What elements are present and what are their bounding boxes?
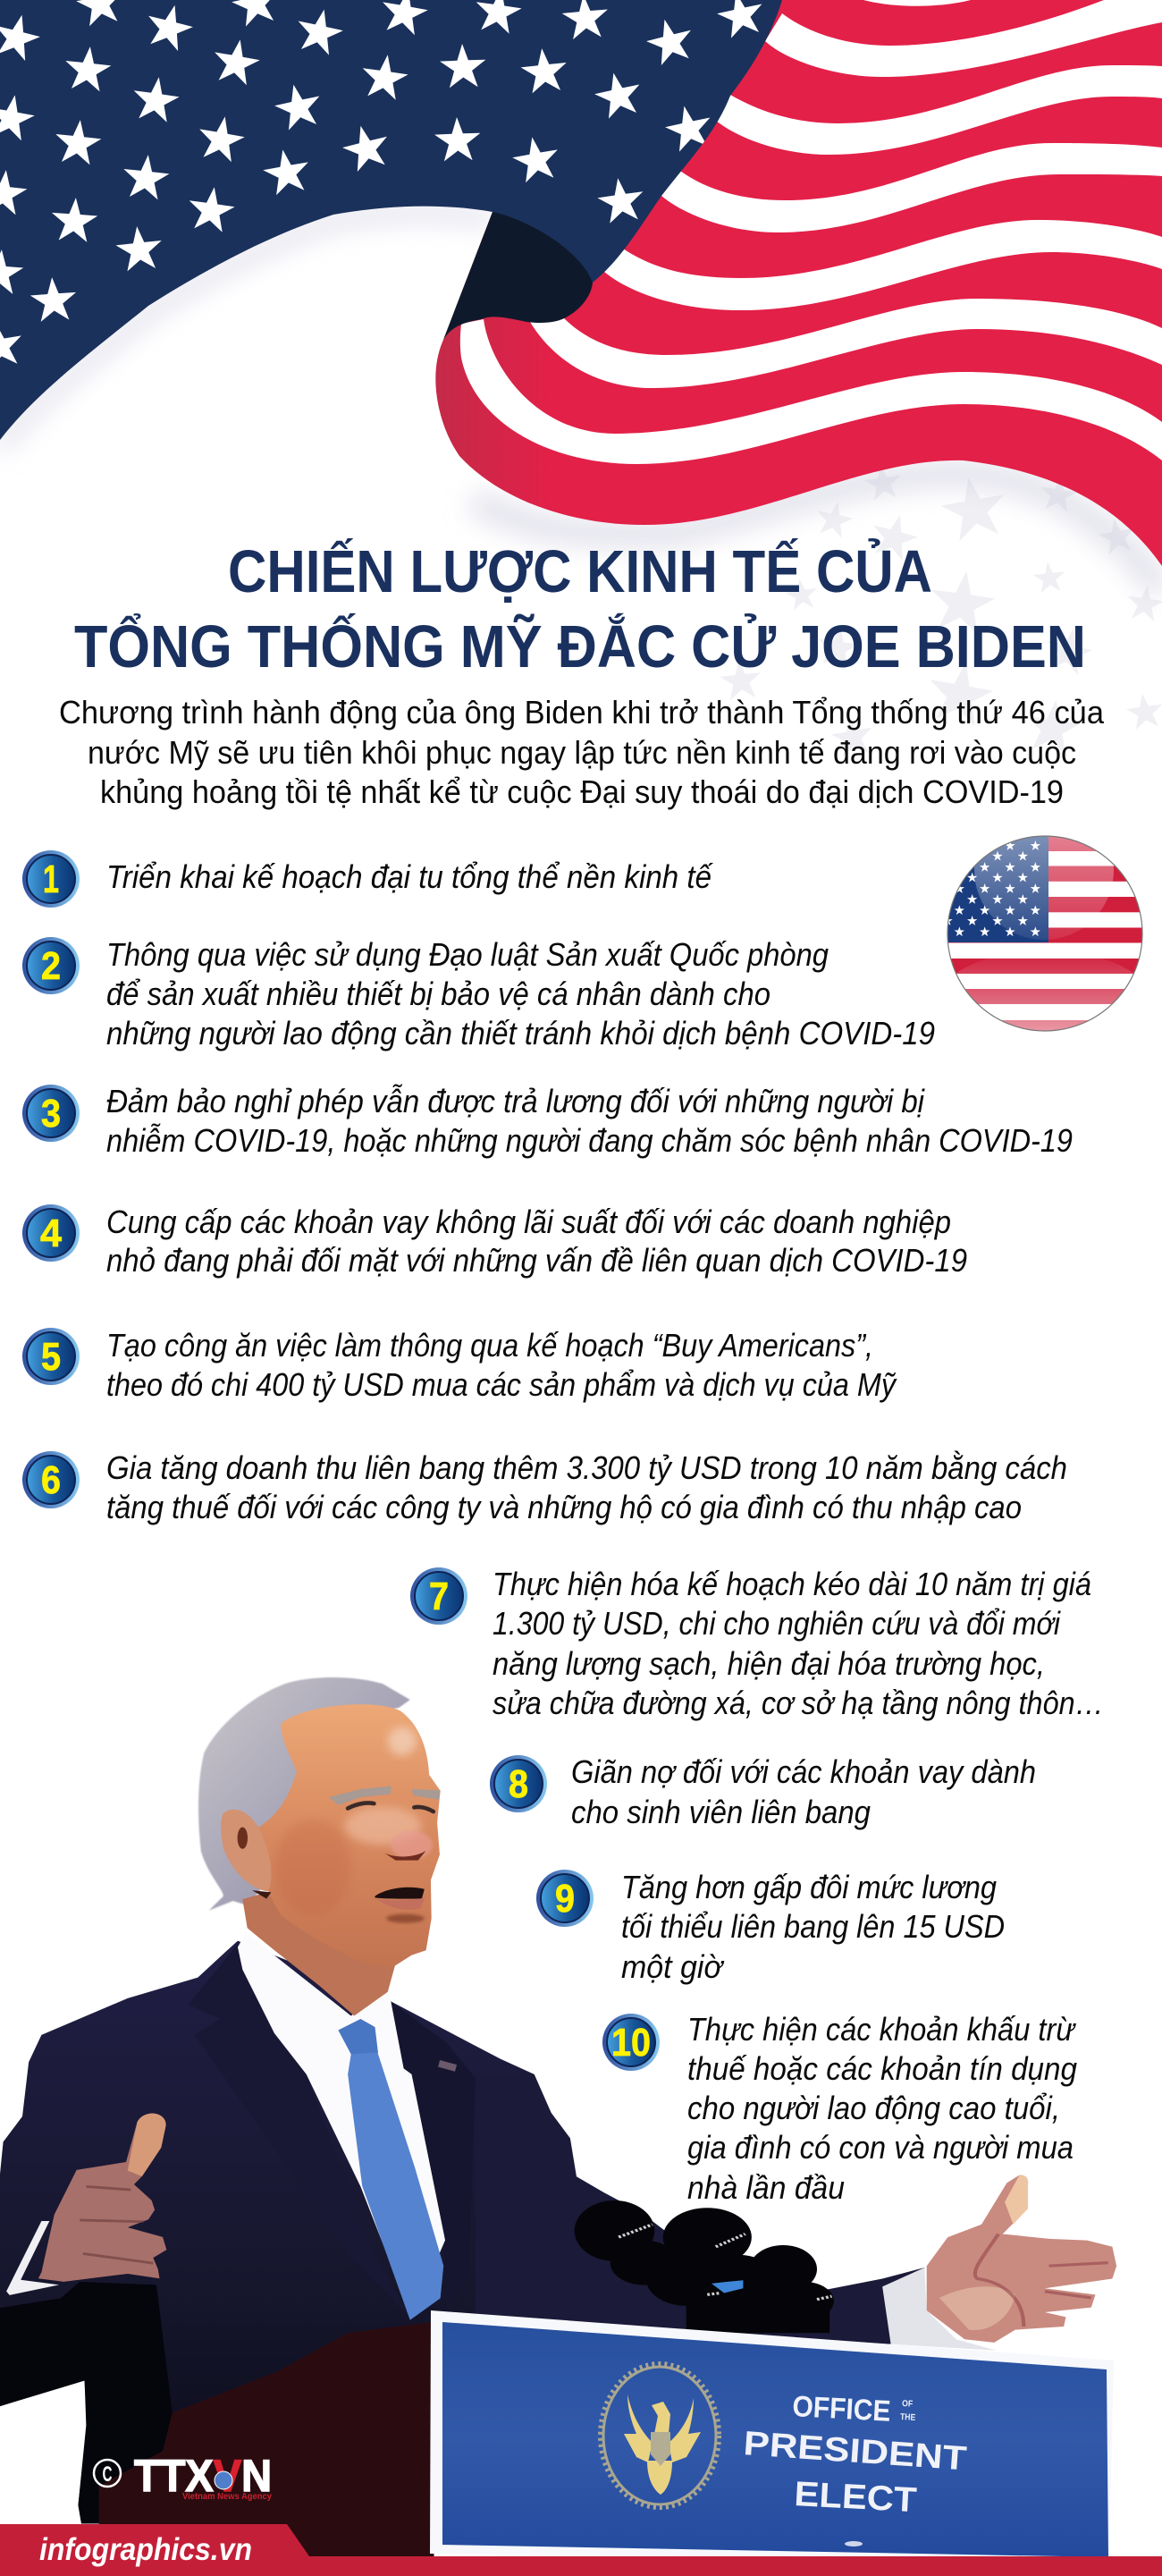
text 3	[106, 1083, 1073, 1159]
podium lettering: THE	[900, 2412, 916, 2423]
list item 3	[22, 1083, 1073, 1159]
podium lettering: ELECT	[794, 2475, 918, 2520]
text 10: Thực hiện các khoản khấu trừ	[687, 2011, 1076, 2048]
text 10	[687, 2011, 1077, 2206]
text 7: năng lượng sạch, hiện đại hóa trường học,	[493, 1645, 1045, 1682]
icon: round US flag	[947, 835, 1143, 1032]
website label: infographics.vn	[39, 2532, 252, 2567]
badge 5	[22, 1328, 80, 1385]
badge 3: 3	[41, 1092, 61, 1136]
text 2: để sản xuất nhiều thiết bị bảo vệ cá nhân dành cho	[106, 976, 770, 1012]
title: TỔNG THỐNG MỸ ĐẮC CỬ JOE BIDEN	[74, 612, 1086, 680]
right hand	[927, 2175, 1116, 2343]
dark lower sleeve	[0, 2282, 173, 2523]
list item 2	[22, 936, 935, 1052]
text 8: cho sinh viên liên bang	[571, 1794, 871, 1830]
white stripes	[460, 0, 1162, 464]
text 10: cho người lao động cao tuổi,	[687, 2090, 1060, 2126]
chin shadow	[386, 1914, 425, 1923]
title	[74, 538, 1086, 680]
list item 7	[410, 1566, 1104, 1721]
photo: Joe Biden at the podium	[0, 1677, 1116, 2563]
presidential seal	[601, 2364, 719, 2507]
text 2: Thông qua việc sử dụng Đạo luật Sản xuất Quốc phòng	[106, 936, 829, 973]
text 2: những người lao động cần thiết tránh khỏi dịch bệnh COVID-19	[106, 1015, 935, 1052]
copyright mark: C	[102, 2462, 113, 2487]
podium lettering: OF	[902, 2399, 913, 2410]
text 4: Cung cấp các khoản vay không lãi suất đối với các doanh nghiệp	[106, 1204, 951, 1240]
text 10: thuế hoặc các khoản tín dụng	[687, 2050, 1077, 2087]
podium lettering	[742, 2389, 968, 2546]
jacket lapel folds	[189, 1944, 410, 2318]
globe	[215, 2471, 232, 2489]
intro paragraph: nước Mỹ sẽ ưu tiên khôi phục ngay lập tức nền kinh tế đang rơi vào cuộc	[88, 734, 1076, 771]
ear	[221, 1810, 271, 1898]
badge 4: 4	[40, 1212, 63, 1255]
canton stars	[0, 0, 768, 370]
agency tagline: Vietnam News Agency	[182, 2492, 272, 2502]
badge 10: 10	[611, 2021, 651, 2065]
left hand	[6, 2114, 166, 2295]
text 7: 1.300 tỷ USD, chi cho nghiên cứu và đổi mới	[493, 1605, 1061, 1642]
badge 1: 1	[43, 857, 59, 901]
text 1: Triển khai kế hoạch đại tu tổng thể nền kinh tế	[106, 858, 714, 895]
text 9: Tăng hơn gấp đôi mức lương	[621, 1869, 997, 1905]
podium sign	[430, 2310, 1114, 2559]
footer bar	[0, 2524, 1162, 2576]
intro paragraph: khủng hoảng tồi tệ nhất kể từ cuộc Đại suy thoái do đại dịch COVID-19	[100, 773, 1064, 810]
text 10: nhà lần đầu	[687, 2169, 845, 2206]
blue tie	[338, 2019, 443, 2320]
text 9: một giờ	[621, 1948, 725, 1985]
figure: head and torso	[0, 1677, 543, 2523]
figure: right arm, microphones and hand	[476, 2074, 1116, 2351]
text 6: tăng thuế đối với các công ty và những hộ có gia đình có thu nhập cao	[106, 1489, 1022, 1525]
microphones	[575, 2200, 834, 2333]
text 4: nhỏ đang phải đối mặt với những vấn đề liên quan dịch COVID-19	[106, 1242, 967, 1279]
text 5	[106, 1327, 897, 1403]
neck	[242, 1887, 396, 2015]
eyes	[348, 1803, 434, 1812]
text 6: Gia tăng doanh thu liên bang thêm 3.300 tỷ USD trong 10 năm bằng cách	[106, 1449, 1067, 1486]
text 7: Thực hiện hóa kế hoạch kéo dài 10 năm trị giá	[493, 1566, 1091, 1602]
badge 3	[22, 1085, 80, 1142]
badge 4	[22, 1204, 80, 1262]
sign board	[430, 2310, 1114, 2559]
text 7: sửa chữa đường xá, cơ sở hạ tầng nông thôn…	[493, 1685, 1104, 1721]
mouth	[375, 1888, 425, 1910]
badge 6	[22, 1451, 80, 1508]
dark flag fold	[443, 212, 593, 340]
badge 6: 6	[41, 1458, 61, 1502]
text 8	[571, 1753, 1036, 1830]
badge 10	[602, 2014, 660, 2071]
badge 8: 8	[509, 1762, 528, 1806]
badge 2: 2	[41, 944, 61, 988]
list item 1	[22, 850, 714, 908]
badge 2	[22, 937, 80, 994]
text 5: theo đó chi 400 tỷ USD mua các sản phẩm và dịch vụ của Mỹ	[106, 1366, 897, 1403]
hair	[198, 1677, 410, 1911]
text 5: Tạo công ăn việc làm thông qua kế hoạch “Buy Americans”,	[106, 1327, 873, 1364]
list item 8	[490, 1753, 1036, 1830]
right shoulder and sleeve	[476, 2074, 924, 2344]
face	[256, 1704, 441, 1966]
navy canton	[0, 0, 782, 440]
eyebrows	[329, 1786, 441, 1805]
podium lettering: OFFICE	[792, 2389, 891, 2428]
text 7	[493, 1566, 1104, 1721]
badge 5: 5	[41, 1335, 61, 1379]
badge 8	[490, 1755, 547, 1812]
lapel pin	[438, 2060, 457, 2072]
badge 9	[536, 1870, 594, 1927]
TTXVN wordmark: TTXVN	[134, 2451, 272, 2501]
list item 9	[536, 1869, 1005, 1985]
wooden podium body	[99, 2322, 434, 2563]
faint background stars	[718, 462, 1162, 758]
text 3: nhiễm COVID-19, hoặc những người đang chăm sóc bệnh nhân COVID-19	[106, 1122, 1073, 1159]
badge 9: 9	[555, 1877, 575, 1921]
red field	[435, 0, 1162, 566]
text 9	[621, 1869, 1005, 1985]
suit jacket	[0, 1941, 543, 2523]
text 10: gia đình có con và người mua	[687, 2129, 1074, 2166]
badge 7	[410, 1567, 467, 1625]
text 2	[106, 936, 935, 1052]
list item 4	[22, 1204, 967, 1279]
copyright mark	[94, 2460, 121, 2487]
shirt cuff	[882, 2268, 997, 2351]
flag shadow	[0, 213, 1162, 590]
badge 7: 7	[429, 1575, 449, 1618]
waving flag	[0, 0, 1162, 566]
text 9: tối thiểu liên bang lên 15 USD	[621, 1908, 1005, 1945]
list item 6	[22, 1449, 1067, 1525]
TTXVN logo	[94, 2451, 272, 2502]
title: CHIẾN LƯỢC KINH TẾ CỦA	[228, 538, 932, 605]
badge 1	[22, 850, 80, 908]
text 6	[106, 1449, 1067, 1525]
eagle	[624, 2394, 701, 2495]
nose shadow	[384, 1851, 426, 1861]
text 4	[106, 1204, 967, 1279]
intro paragraph	[59, 694, 1105, 810]
face shading	[274, 1727, 433, 1915]
text 8: Giãn nợ đối với các khoản vay dành	[571, 1753, 1036, 1790]
podium lettering: PRESIDENT	[742, 2425, 968, 2478]
white shirt	[238, 1933, 445, 2318]
list item 5	[22, 1327, 897, 1403]
list item 10	[602, 2011, 1077, 2206]
intro paragraph: Chương trình hành động của ông Biden khi trở thành Tổng thống thứ 46 của	[59, 694, 1105, 731]
text 3: Đảm bảo nghỉ phép vẫn được trả lương đối với những người bị	[106, 1083, 925, 1119]
